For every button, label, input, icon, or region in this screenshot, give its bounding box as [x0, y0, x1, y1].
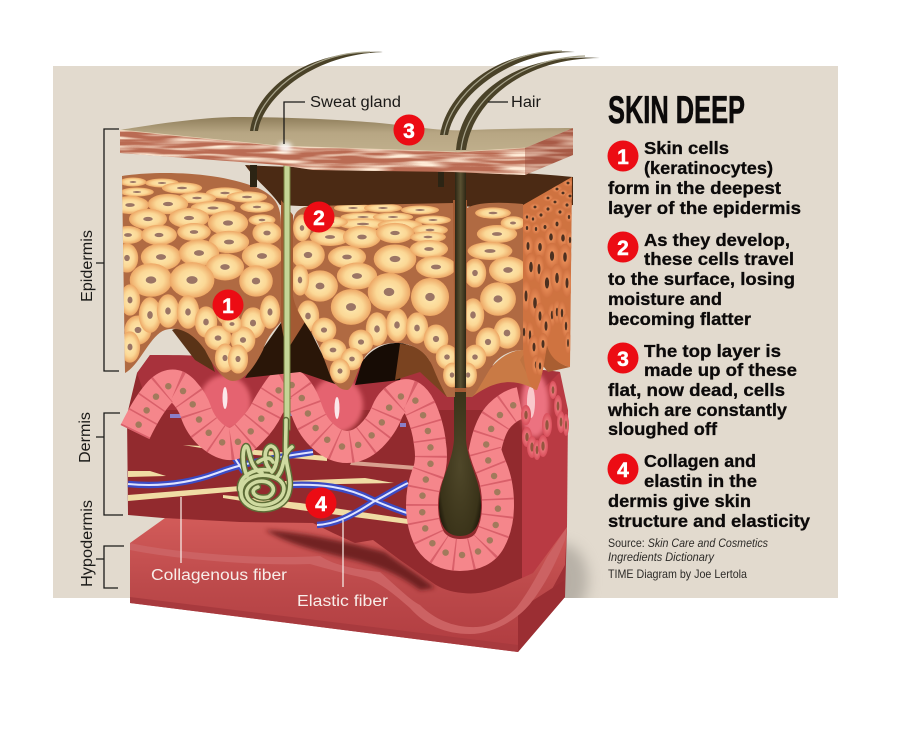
leader: hair [488, 101, 508, 103]
hypodermis bracket [79, 500, 124, 588]
text block 2: becoming flatter [608, 309, 751, 329]
side pink cells [521, 381, 569, 460]
text block 1: layer of the epidermis [608, 198, 801, 218]
collagenous fiber callout: Collagenous fiber [151, 567, 287, 584]
source and credit: Ingredients Dictionary [608, 550, 715, 564]
right hair [456, 56, 600, 150]
text block 1: (keratinocytes) [644, 158, 773, 178]
epidermis arch interiors [172, 200, 570, 397]
epidermis underside shadow [245, 165, 573, 210]
diagram badge 3: 3 [403, 120, 415, 143]
surface layer (stratum corneum) [118, 117, 575, 178]
text block 1 [608, 138, 801, 218]
diagram badge 1 [212, 290, 244, 320]
hypodermis bracket: Hypodermis [79, 500, 96, 587]
background panel [53, 66, 838, 598]
sweat pore [278, 142, 292, 152]
text block 4: Collagen and [644, 451, 756, 471]
text block 2: these cells travel [644, 249, 794, 269]
diagram badge 2 [304, 202, 334, 232]
text block 1: 1 [617, 146, 629, 169]
dermis bracket [77, 412, 123, 515]
collagenous fibers [128, 445, 416, 524]
text block 2: 2 [617, 237, 629, 260]
title: SKIN DEEP [608, 89, 745, 132]
elastic fibers [128, 451, 408, 525]
upper elastic fragments [170, 414, 406, 425]
text block 3: made up of these [644, 360, 797, 380]
label: hair: Hair [511, 94, 541, 111]
diagram badge 4: 4 [315, 493, 327, 516]
text block 3: flat, now dead, cells [608, 380, 785, 400]
collagenous fiber callout [151, 497, 287, 584]
sweat gland duct and coil [240, 150, 292, 509]
hair follicle bulb [439, 380, 481, 536]
diagram badge 3 [394, 114, 424, 146]
text block 3: 3 [617, 348, 629, 371]
label: sweat gland: Sweat gland [310, 94, 401, 111]
epidermis right side face [523, 177, 572, 390]
dermis bracket: Dermis [77, 412, 94, 463]
text block 3: The top layer is [644, 341, 781, 361]
right block keratinocytes [466, 207, 523, 388]
text block 1: form in the deepest [608, 178, 781, 198]
text block 2: moisture and [608, 289, 722, 309]
text block 4: elastin in the [644, 471, 757, 491]
pink basal cell band [135, 384, 520, 555]
text block 2: As they develop, [644, 230, 790, 250]
hair shaft through epidermis [455, 148, 466, 388]
text block 4 [608, 451, 810, 531]
epidermis front cells [122, 173, 523, 397]
epidermis bracket [79, 129, 119, 371]
diagram badge 2: 2 [313, 207, 325, 230]
hypodermis layer [130, 518, 567, 652]
hairs [250, 51, 600, 150]
text block 3: which are constantly [607, 400, 787, 420]
text block 4: dermis give skin [608, 491, 751, 511]
middle block keratinocytes [291, 204, 461, 387]
leader: sweat gland [284, 102, 305, 144]
source and credit: Source: Skin Care and Cosmetics [608, 536, 768, 550]
left block keratinocytes [111, 178, 282, 374]
elastic fiber callout: Elastic fiber [297, 593, 388, 610]
pink papilla blobs [199, 373, 549, 437]
text block 2: to the surface, losing [608, 269, 795, 289]
diagram badge 1: 1 [222, 295, 234, 318]
text block 3: sloughed off [608, 419, 717, 439]
epidermis bracket: Epidermis [79, 230, 96, 302]
dermis layer [127, 355, 569, 593]
left hair [250, 52, 385, 131]
elastic fiber callout [297, 520, 388, 610]
source and credit: TIME Diagram by Joe Lertola [608, 567, 747, 581]
text block 2 [608, 230, 795, 329]
text block 4: 4 [617, 459, 629, 482]
hair stubs below surface layer [250, 165, 444, 187]
cast shadow of diagram on panel [564, 540, 594, 598]
middle hair [440, 51, 575, 135]
diagram badge 4 [306, 488, 336, 518]
text block 4: structure and elasticity [608, 511, 810, 531]
source and credit [608, 536, 768, 581]
text block 3 [607, 341, 797, 439]
skin diagram [77, 51, 810, 652]
text block 1: Skin cells [644, 138, 729, 158]
